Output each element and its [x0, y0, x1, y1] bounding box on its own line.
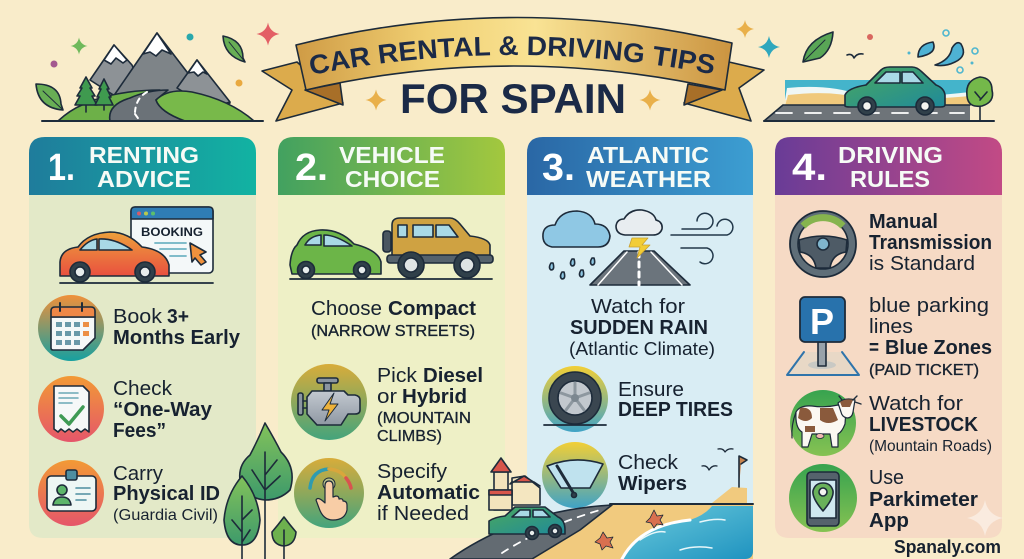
text: manual transmission: Transmission — [869, 232, 992, 254]
text: diesel or hybrid — [377, 365, 483, 445]
panel: renting advice — [29, 137, 256, 538]
text: sudden rain: (Atlantic Climate) — [569, 339, 715, 359]
header: vehicle choice: VEHICLE — [339, 142, 445, 168]
text: deep tires — [618, 379, 733, 421]
watermark sparkle — [967, 500, 1003, 536]
text: one-way fees: Fees” — [113, 420, 166, 442]
text: blue zones: lines — [869, 316, 913, 338]
icon: engine — [291, 364, 367, 440]
text: livestock: (Mountain Roads) — [869, 438, 992, 455]
text: parkimeter app: Parkimeter — [869, 489, 978, 511]
text: parkimeter app: Use — [869, 467, 904, 489]
text: specify automatic: Specify — [377, 461, 447, 483]
illustration: coastal road, village and beach — [450, 449, 753, 559]
panel: atlantic weather — [527, 137, 753, 559]
text: blue zones: (PAID TICKET) — [869, 362, 979, 379]
header: atlantic weather: ATLANTIC — [587, 142, 709, 168]
text: livestock — [869, 393, 992, 455]
header: renting advice: ADVICE — [97, 166, 191, 192]
illustration: compact car and suv — [290, 218, 493, 279]
brand credit: Spanaly.com — [894, 537, 1001, 557]
text: book early: 3+ — [167, 306, 189, 328]
icon: parking sign: P — [810, 301, 834, 342]
illustration: coast and green car — [764, 67, 994, 121]
text: livestock: Watch for — [869, 393, 963, 415]
text: sudden rain: SUDDEN RAIN — [570, 317, 708, 339]
text: physical id: Physical ID — [113, 483, 220, 505]
header: atlantic weather: 3. — [542, 147, 575, 189]
header: vehicle choice: CHOICE — [345, 166, 440, 192]
text: manual transmission: is Standard — [869, 253, 975, 275]
icon: leaf upper — [223, 36, 245, 62]
title banner — [261, 16, 765, 122]
text: specify automatic: if Needed — [377, 503, 469, 525]
decorative sparkles — [50, 20, 873, 473]
text: specify automatic: Automatic — [377, 482, 480, 504]
title line 2: FOR SPAIN — [400, 75, 626, 122]
text: deep tires: Ensure — [618, 379, 684, 401]
text: sudden rain: Watch for — [591, 296, 685, 318]
text: choose compact: Compact — [388, 298, 476, 320]
text: check wipers: Check — [618, 452, 679, 474]
header: renting advice — [29, 137, 256, 195]
text: blue zones: blue parking — [869, 295, 989, 317]
icon: id card — [38, 460, 104, 526]
icon: leaf right — [803, 32, 833, 62]
text: choose compact: (NARROW STREETS) — [311, 323, 475, 340]
panel: driving rules — [775, 137, 1002, 538]
icon: water splashes — [908, 30, 978, 73]
text: blue zones: Blue Zones — [885, 337, 992, 359]
text: diesel or hybrid: CLIMBS) — [377, 428, 442, 445]
icon: cow — [790, 390, 861, 456]
icon: phone with location pin — [789, 464, 857, 532]
text: choose compact — [311, 298, 476, 340]
icon: steering wheel — [790, 211, 856, 277]
icon: tire — [542, 366, 608, 432]
text: book early: Book — [113, 306, 163, 328]
icon: parking sign — [787, 297, 859, 375]
header: driving rules: DRIVING — [838, 142, 943, 168]
icon: calendar — [38, 295, 104, 361]
text: book early: Months Early — [113, 327, 241, 349]
text: sudden rain — [569, 296, 715, 359]
text: diesel or hybrid: Pick — [377, 365, 418, 387]
header: driving rules: 4. — [792, 147, 827, 189]
text: deep tires: DEEP TIRES — [618, 399, 733, 421]
text: parkimeter app — [869, 467, 978, 532]
text: livestock: LIVESTOCK — [869, 414, 979, 436]
text: physical id: (Guardia Civil) — [113, 507, 218, 524]
illustration: trees — [224, 423, 296, 559]
text: one-way fees: “One-Way — [113, 399, 213, 421]
text: diesel or hybrid: (MOUNTAIN — [377, 410, 471, 427]
text: diesel or hybrid: Hybrid — [402, 386, 467, 408]
text: check wipers — [618, 452, 687, 495]
icon: leaf left — [36, 84, 63, 110]
icon: windshield wipers — [542, 442, 608, 508]
text: blue zones — [869, 295, 992, 379]
text: physical id: Carry — [113, 463, 163, 485]
text: manual transmission: Manual — [869, 211, 938, 233]
header: renting advice: RENTING — [89, 142, 199, 168]
text: book early — [113, 306, 241, 349]
text: specify automatic — [377, 461, 480, 525]
header: vehicle choice: 2. — [295, 147, 328, 189]
text: physical id — [113, 463, 220, 524]
illustration: booking window and car — [60, 207, 213, 283]
icon: receipt — [38, 376, 104, 442]
header: vehicle choice — [278, 137, 505, 195]
illustration: mountain scene — [42, 33, 263, 121]
header: renting advice: 1. — [48, 147, 75, 189]
text: diesel or hybrid: or — [377, 386, 397, 408]
text: choose compact: Choose — [311, 298, 382, 320]
header: driving rules — [775, 137, 1002, 195]
header: driving rules: RULES — [850, 166, 930, 192]
icon: birds — [847, 54, 863, 58]
text: diesel or hybrid: Diesel — [423, 365, 483, 387]
title line 1: CAR RENTAL & DRIVING TIPS — [310, 36, 714, 74]
text: manual transmission — [869, 211, 992, 275]
text: one-way fees — [113, 378, 213, 442]
text: one-way fees: Check — [113, 378, 173, 400]
text: parkimeter app: App — [869, 510, 909, 532]
text: check wipers: Wipers — [618, 473, 687, 495]
illustration: rain, storm, wind and road — [543, 210, 733, 285]
panel: vehicle choice — [278, 137, 505, 538]
illustration: booking window and car: BOOKING — [141, 225, 203, 239]
header: atlantic weather: WEATHER — [586, 166, 711, 192]
text: blue zones: = — [869, 337, 879, 359]
header: atlantic weather — [527, 137, 753, 195]
icon: automatic gauge and hand — [294, 458, 364, 528]
